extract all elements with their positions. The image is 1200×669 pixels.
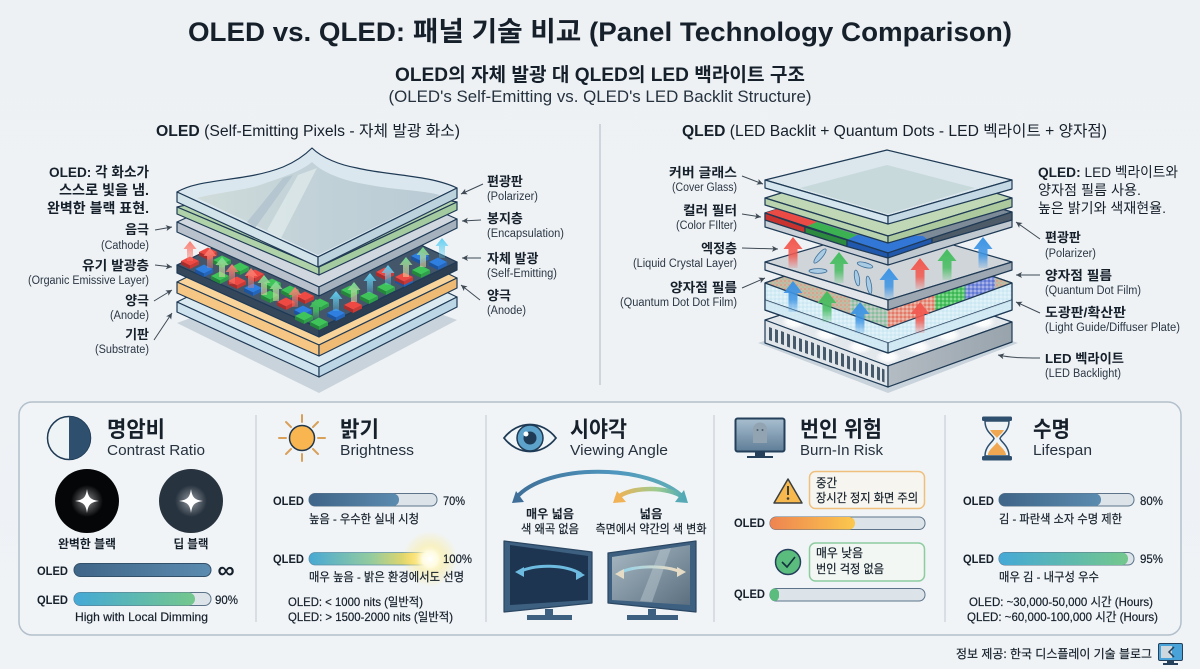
anode layer (177, 212, 457, 356)
QLED bar (734, 587, 925, 601)
deep black sample: 딥 블랙 (174, 537, 208, 551)
OLED viewing text: 색 왜곡 없음 (521, 522, 579, 536)
label: anode: (Anode) (110, 310, 149, 322)
heading: 밝기 (340, 417, 379, 442)
label: substrate (95, 327, 149, 356)
label: cathode: 음극 (125, 222, 149, 237)
label: light guide (1045, 305, 1180, 334)
QLED bar (273, 531, 472, 587)
heading: Lifespan (1033, 442, 1092, 459)
nits figures (288, 595, 453, 624)
heading (1033, 417, 1092, 459)
label: encapsulation: (Encapsulation) (487, 228, 564, 240)
emission arrows (184, 238, 448, 319)
label: cover glass: (Cover Glass) (672, 182, 737, 194)
heading: Brightness (340, 442, 414, 459)
hours figures: OLED: ~30,000-50,000 시간 (Hours) (969, 595, 1153, 609)
label: substrate: (Substrate) (95, 344, 149, 356)
QLED bar: 100% (443, 552, 472, 566)
QLED bar: QLED (734, 587, 765, 601)
label: encapsulation (487, 211, 564, 240)
lower light arrows (784, 281, 930, 333)
label: LED backlight (1045, 351, 1124, 380)
label: anode: 양극 (487, 288, 511, 303)
OLED bar: ∞ (217, 557, 235, 584)
callout: very low risk: 번인 걱정 없음 (816, 562, 884, 576)
QLED heading: QLED (LED Backlit + Quantum Dots - LED 벡라이트 + 양자점) (682, 122, 1107, 140)
perfect black sample (55, 469, 119, 551)
icon: hourglass (982, 416, 1012, 460)
OLED layer stack diagram (177, 148, 457, 393)
label: color filter (676, 203, 737, 232)
icon: ghost monitor (736, 418, 784, 458)
heading (800, 417, 883, 459)
OLED bar: 80% (1140, 494, 1163, 508)
heading: Burn-In Risk (800, 442, 883, 459)
OLED caption: 완벽한 블랙 표현. (47, 200, 149, 216)
nits figures: QLED: > 1500-2000 nits (일반적) (288, 610, 453, 624)
heading: 명암비 (107, 417, 165, 442)
label: self-emitting (487, 251, 557, 280)
QLED viewing text (596, 507, 706, 536)
OLED right labels (487, 174, 564, 317)
OLED note: 김 - 파란색 소자 수명 제한 (999, 512, 1122, 526)
nits figures: OLED: < 1000 nits (일반적) (288, 595, 423, 609)
QLED caption: 양자점 필름 사용. (1038, 182, 1141, 198)
callout: very low risk (810, 543, 924, 581)
QLED bar (963, 552, 1163, 566)
label: quantum dot film: (Quantum Dot Film) (1045, 285, 1141, 297)
label: cover glass: 커버 글래스 (669, 165, 737, 180)
label: polarizer: (Polarizer) (487, 191, 538, 203)
label: liquid crystal layer: (Liquid Crystal Layer) (633, 258, 737, 270)
callout: medium risk: 중간 (816, 476, 837, 490)
OLED viewing text (521, 506, 579, 536)
label: polarizer (487, 174, 538, 203)
label: encapsulation: 봉지층 (487, 211, 523, 226)
label: organic emissive layer: 유기 발광층 (82, 258, 149, 273)
liquid crystal layer (765, 226, 1012, 310)
heading (340, 417, 414, 459)
liquid crystals (809, 247, 873, 294)
QLED left labels (620, 165, 737, 309)
label: cover glass (669, 165, 737, 194)
shadow (758, 300, 1018, 393)
QLED note: 매우 김 - 내구성 우수 (999, 570, 1099, 584)
deep black sample (159, 469, 223, 551)
heading: 수명 (1033, 417, 1070, 442)
label: color filter: 컬러 필터 (683, 203, 737, 218)
OLED bar: 70% (443, 494, 465, 508)
icon: footer monitor (1158, 644, 1182, 665)
monitor: OLED (504, 541, 592, 620)
footer credit: 정보 제공: 한국 디스플레이 기술 블로그 (956, 647, 1152, 661)
metric: burn-in risk (734, 417, 925, 601)
label: cathode (101, 222, 149, 252)
subtitle: (OLED's Self-Emitting vs. QLED's LED Backlit Structure) (388, 87, 812, 106)
LED light spots (781, 315, 996, 364)
icon: sun (279, 415, 325, 461)
QLED caption (1038, 164, 1178, 216)
OLED heading: OLED (Self-Emitting Pixels - 자체 발광 화소) (156, 122, 460, 140)
panel: OLED structure (28, 122, 564, 393)
OLED caption: 스스로 빛을 냄. (59, 182, 149, 198)
label: light guide: (Light Guide/Diffuser Plate) (1045, 322, 1180, 334)
green layer (765, 160, 1012, 243)
label: liquid crystal layer (633, 241, 737, 270)
OLED bar: OLED (37, 564, 68, 578)
label: quantum dot film: 양자점 필름 (1045, 268, 1112, 283)
panel: comparison metrics (19, 402, 1181, 635)
OLED viewing text: 매우 넓음 (526, 506, 574, 521)
label: self-emitting: 자체 발광 (487, 251, 538, 266)
label: self-emitting: (Self-Emitting) (487, 268, 557, 280)
label: organic emissive layer: (Organic Emissive Layer) (28, 275, 149, 287)
label: color filter: (Color FIlter) (676, 220, 737, 232)
heading (107, 417, 205, 459)
QLED bar: QLED (273, 552, 304, 566)
OLED bar (734, 516, 925, 530)
icon: eye (504, 424, 556, 452)
subtitle (388, 64, 812, 106)
note: High with Local Dimming (75, 610, 208, 624)
label: light guide: 도광판/확산판 (1045, 305, 1126, 320)
OLED note: 높음 - 우수한 실내 시청 (309, 512, 419, 526)
metric: brightness (273, 415, 472, 624)
substrate layer (177, 232, 457, 377)
label: liquid crystal layer: 엑정층 (701, 241, 737, 256)
QLED bar: 95% (1140, 552, 1163, 566)
heading: 번인 위험 (800, 417, 882, 442)
QLED right labels (1045, 230, 1180, 380)
QLED caption: QLED: LED 벡라이트와 (1038, 164, 1178, 180)
subtitle: OLED의 자체 발광 대 QLED의 LED 백라이트 구조 (395, 64, 805, 86)
label: quantum dot film (620, 280, 737, 309)
QLED caption: 높은 밝기와 색재현율. (1038, 200, 1166, 216)
panel: QLED structure (620, 122, 1180, 393)
icon: half circle (48, 416, 90, 460)
hours figures (967, 595, 1158, 624)
label: polarizer: 편광판 (487, 174, 523, 189)
RGB sub-pixels (181, 248, 447, 330)
label: quantum dot film: (Quantum Dot Dot Film) (620, 297, 737, 309)
label: quantum dot film: 양자점 필름 (670, 280, 737, 295)
callout: medium risk (810, 472, 924, 508)
monitor: QLED (608, 541, 696, 620)
color filter layer (765, 175, 1012, 265)
shadow (177, 270, 457, 393)
OLED bar (37, 557, 235, 584)
QLED layer stack diagram (758, 150, 1018, 393)
QLED note: 매우 높음 - 밝은 환경에서도 선명 (309, 570, 464, 584)
OLED caption: OLED: 각 화소가 (49, 164, 149, 180)
heading: Contrast Ratio (107, 442, 205, 459)
QLED leader arrows (742, 176, 1040, 358)
label: LED backlight: (LED Backlight) (1045, 368, 1121, 380)
polarizer layer (177, 148, 457, 267)
callout: very low risk: 매우 낮음 (816, 546, 863, 560)
label: quantum dot film (1045, 268, 1141, 297)
label: anode (110, 293, 149, 322)
LED backlight layer (765, 280, 1012, 387)
cover glass (765, 150, 1012, 224)
hours figures: QLED: ~60,000-100,000 시간 (Hours) (967, 610, 1158, 624)
OLED leader arrows (154, 184, 483, 340)
OLED bar: OLED (273, 494, 304, 508)
OLED left labels (28, 222, 149, 356)
encapsulation layer (177, 175, 457, 275)
OLED bar: OLED (734, 516, 765, 530)
label: organic emissive layer (28, 258, 149, 287)
organic emissive layer (177, 197, 457, 337)
wide angle arcs (512, 472, 688, 503)
label: polarizer (1045, 230, 1096, 260)
OLED bar (963, 494, 1163, 508)
cathode layer (177, 158, 457, 296)
label: polarizer: 편광판 (1045, 230, 1081, 245)
label: anode: 양극 (125, 293, 149, 308)
heading: Viewing Angle (570, 442, 668, 459)
title: OLED vs. QLED: 패널 기술 비교 (Panel Technology Comparison) (188, 17, 1012, 47)
QLED bar (37, 592, 238, 607)
label: cathode: (Cathode) (101, 240, 149, 252)
label: anode: (Anode) (487, 305, 526, 317)
QLED bar: QLED (963, 552, 994, 566)
icon: check (776, 550, 800, 574)
perfect black sample: 완벽한 블랙 (58, 536, 116, 551)
QLED viewing text: 넓음 (640, 507, 662, 521)
metric: contrast ratio (37, 416, 238, 624)
OLED caption (47, 164, 149, 216)
light guide and quantum dot film (765, 240, 1012, 353)
heading (570, 417, 668, 459)
OLED bar (273, 494, 465, 508)
metric: viewing angle (504, 417, 706, 620)
heading: 시야각 (570, 417, 627, 442)
QLED bar: QLED (37, 593, 68, 607)
QLED bar: 90% (215, 593, 238, 607)
icon: warning (774, 479, 802, 503)
label: anode (487, 288, 526, 317)
label: polarizer: (Polarizer) (1045, 248, 1096, 260)
QLED viewing text: 측면에서 약간의 색 변화 (596, 521, 706, 536)
metric: lifespan (963, 416, 1163, 624)
callout: medium risk: 장시간 정지 화면 주의 (816, 491, 918, 505)
upper light arrows (784, 237, 992, 299)
label: LED backlight: LED 벡라이트 (1045, 351, 1124, 366)
OLED bar: OLED (963, 494, 994, 508)
LED vents (769, 327, 884, 382)
label: substrate: 기판 (125, 327, 149, 342)
